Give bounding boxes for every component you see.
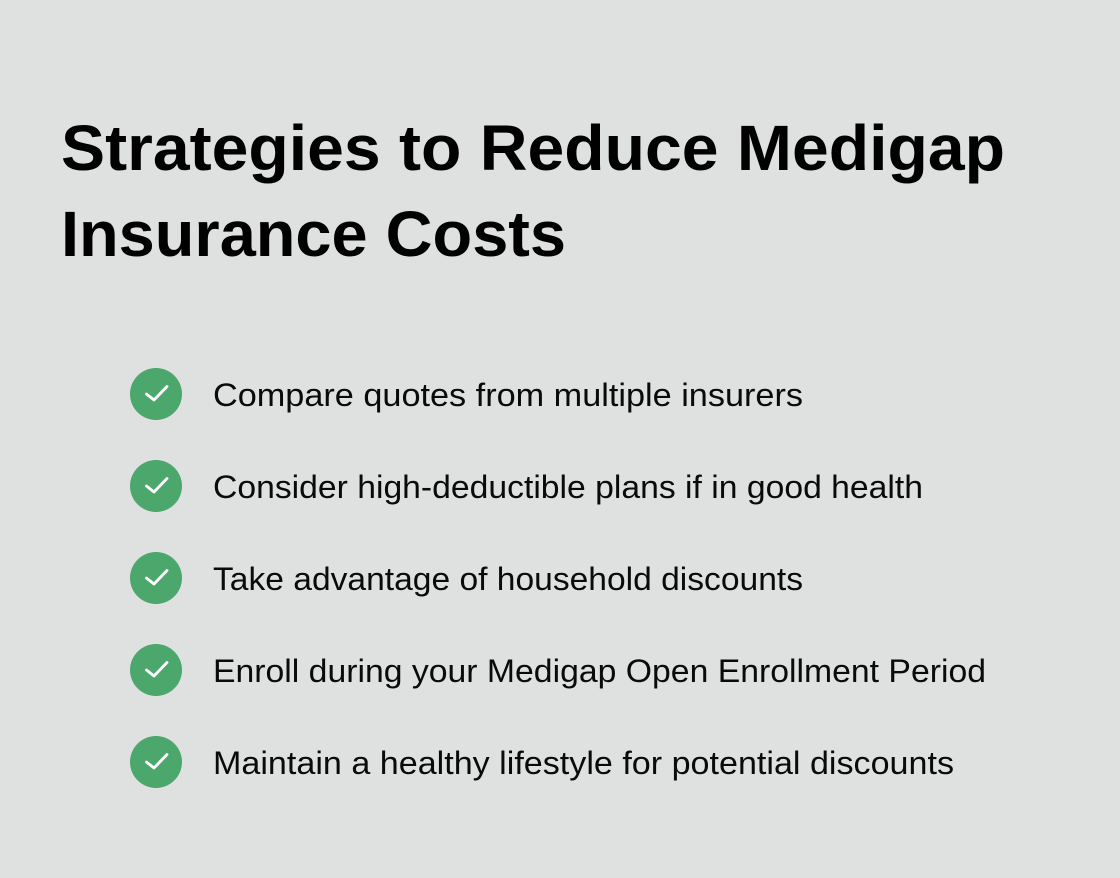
icon: check circle bbox=[130, 368, 182, 420]
icon: check circle bbox=[130, 736, 182, 788]
item text: Consider high-deductible plans if in good health bbox=[213, 469, 923, 505]
checklist bbox=[130, 368, 986, 788]
icon: check circle bbox=[130, 644, 182, 696]
item: compare quotes bbox=[130, 368, 803, 420]
item: household discounts bbox=[130, 552, 803, 604]
item text: Take advantage of household discounts bbox=[213, 561, 803, 597]
title: Insurance Costs bbox=[61, 198, 566, 270]
item: open enrollment bbox=[130, 644, 986, 696]
icon: check circle bbox=[130, 552, 182, 604]
item: high-deductible plans bbox=[130, 460, 923, 512]
title: Strategies to Reduce Medigap bbox=[61, 112, 1005, 184]
item text: Compare quotes from multiple insurers bbox=[213, 377, 803, 413]
icon: check circle bbox=[130, 460, 182, 512]
item text: Enroll during your Medigap Open Enrollment Period bbox=[213, 653, 986, 689]
title bbox=[61, 112, 1005, 270]
item text: Maintain a healthy lifestyle for potential discounts bbox=[213, 745, 954, 781]
item: healthy lifestyle bbox=[130, 736, 954, 788]
